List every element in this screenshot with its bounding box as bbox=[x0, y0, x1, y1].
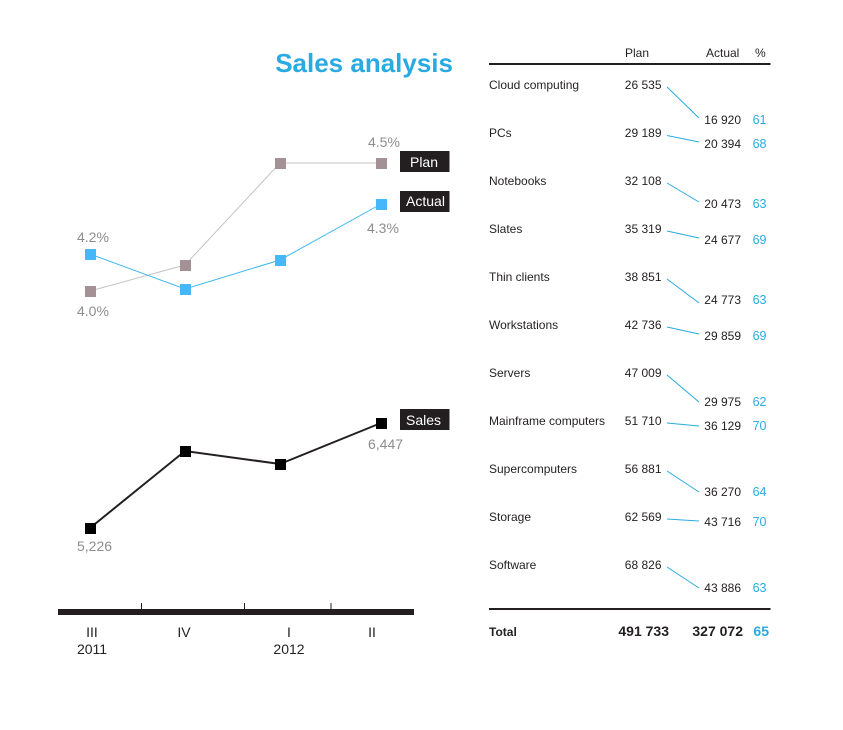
row: Supercomputers bbox=[489, 462, 767, 499]
row: Cloud computing: 26 535 bbox=[625, 78, 662, 92]
row: PCs: 29 189 bbox=[625, 126, 662, 140]
row: Storage bbox=[489, 510, 767, 529]
legend: sales bbox=[400, 409, 450, 430]
time axis: I bbox=[287, 624, 291, 640]
row: Notebooks: 32 108 bbox=[625, 174, 662, 188]
row: Servers: 62 bbox=[753, 395, 767, 409]
row: Slates: 35 319 bbox=[625, 222, 662, 236]
table header: Plan bbox=[625, 46, 649, 60]
time axis: III bbox=[86, 624, 98, 640]
time axis bbox=[58, 603, 414, 657]
row: Servers: 29 975 bbox=[704, 395, 741, 409]
row: Slates bbox=[489, 222, 767, 247]
value labels: 4.5% bbox=[368, 134, 400, 150]
sales value labels: 5,226 bbox=[77, 538, 112, 554]
time axis: IV bbox=[177, 624, 191, 640]
row: Software bbox=[489, 558, 767, 595]
row: Notebooks bbox=[489, 174, 767, 211]
row: Slates: 24 677 bbox=[704, 233, 741, 247]
row: Thin clients: 63 bbox=[753, 293, 767, 307]
row: Mainframe computers: 51 710 bbox=[625, 414, 662, 428]
sales line bbox=[90, 423, 381, 528]
time axis: II bbox=[368, 624, 376, 640]
row: Mainframe computers: 36 129 bbox=[704, 419, 741, 433]
chart: sales bbox=[77, 409, 450, 554]
row: PCs: 68 bbox=[753, 137, 767, 151]
row: Software: 43 886 bbox=[704, 581, 741, 595]
row: PCs: PCs bbox=[489, 126, 512, 140]
value labels bbox=[77, 134, 400, 319]
actual line bbox=[85, 199, 387, 295]
legend: actual bbox=[400, 191, 450, 212]
value labels: 4.0% bbox=[77, 303, 109, 319]
value labels: 4.3% bbox=[367, 220, 399, 236]
row: Servers bbox=[489, 366, 767, 409]
row: PCs bbox=[489, 126, 767, 151]
row: Slates: 69 bbox=[753, 233, 767, 247]
table bbox=[489, 46, 770, 639]
row: Total bbox=[489, 608, 770, 639]
row: Software: 68 826 bbox=[625, 558, 662, 572]
row: Workstations bbox=[489, 318, 767, 343]
row: Cloud computing: 61 bbox=[753, 113, 767, 127]
title: Sales analysis bbox=[275, 48, 453, 78]
table header: % bbox=[755, 46, 766, 60]
row: Thin clients: 24 773 bbox=[704, 293, 741, 307]
row: Notebooks: 20 473 bbox=[704, 197, 741, 211]
value labels: 4.2% bbox=[77, 229, 109, 245]
row: Thin clients bbox=[489, 270, 767, 307]
legend: sales: Sales bbox=[406, 412, 441, 428]
row: Total: 327 072 bbox=[692, 623, 743, 639]
row: Supercomputers: 36 270 bbox=[704, 485, 741, 499]
row: Total: Total bbox=[489, 625, 517, 639]
row: Cloud computing bbox=[489, 78, 767, 127]
legend: actual: Actual bbox=[406, 193, 445, 209]
row: Workstations: 42 736 bbox=[625, 318, 662, 332]
row: Total: 491 733 bbox=[618, 623, 669, 639]
row: Storage: 43 716 bbox=[704, 515, 741, 529]
row: Mainframe computers: 70 bbox=[753, 419, 767, 433]
row: Cloud computing: Cloud computing bbox=[489, 78, 579, 92]
row: Software: Software bbox=[489, 558, 537, 572]
row: PCs: 20 394 bbox=[704, 137, 741, 151]
row: Supercomputers: 64 bbox=[753, 485, 767, 499]
sales value labels: 6,447 bbox=[368, 436, 403, 452]
row: Cloud computing: 16 920 bbox=[704, 113, 741, 127]
legend: plan bbox=[400, 151, 450, 172]
row: Total: 65 bbox=[753, 623, 769, 639]
sales markers bbox=[85, 418, 387, 534]
row: Notebooks: 63 bbox=[753, 197, 767, 211]
time axis: 2011 bbox=[77, 641, 107, 657]
plan line bbox=[85, 158, 387, 297]
row: Servers: 47 009 bbox=[625, 366, 662, 380]
row: Supercomputers: Supercomputers bbox=[489, 462, 577, 476]
table header: Actual bbox=[706, 46, 739, 60]
row: Storage: 70 bbox=[753, 515, 767, 529]
row: Slates: Slates bbox=[489, 222, 522, 236]
row: Workstations: Workstations bbox=[489, 318, 558, 332]
time axis: 2012 bbox=[273, 641, 305, 657]
row: Servers: Servers bbox=[489, 366, 530, 380]
row: Storage: 62 569 bbox=[625, 510, 662, 524]
sales value labels bbox=[77, 436, 403, 554]
table header bbox=[489, 46, 770, 65]
legend: plan: Plan bbox=[410, 154, 438, 170]
row: Thin clients: 38 851 bbox=[625, 270, 662, 284]
row: Storage: Storage bbox=[489, 510, 531, 524]
row: Workstations: 29 859 bbox=[704, 329, 741, 343]
row: Mainframe computers bbox=[489, 414, 767, 433]
row: Workstations: 69 bbox=[753, 329, 767, 343]
row: Notebooks: Notebooks bbox=[489, 174, 546, 188]
row: Thin clients: Thin clients bbox=[489, 270, 550, 284]
row: Software: 63 bbox=[753, 581, 767, 595]
row: Mainframe computers: Mainframe computers bbox=[489, 414, 605, 428]
chart: plan vs actual percentage bbox=[77, 134, 450, 319]
row: Supercomputers: 56 881 bbox=[625, 462, 662, 476]
